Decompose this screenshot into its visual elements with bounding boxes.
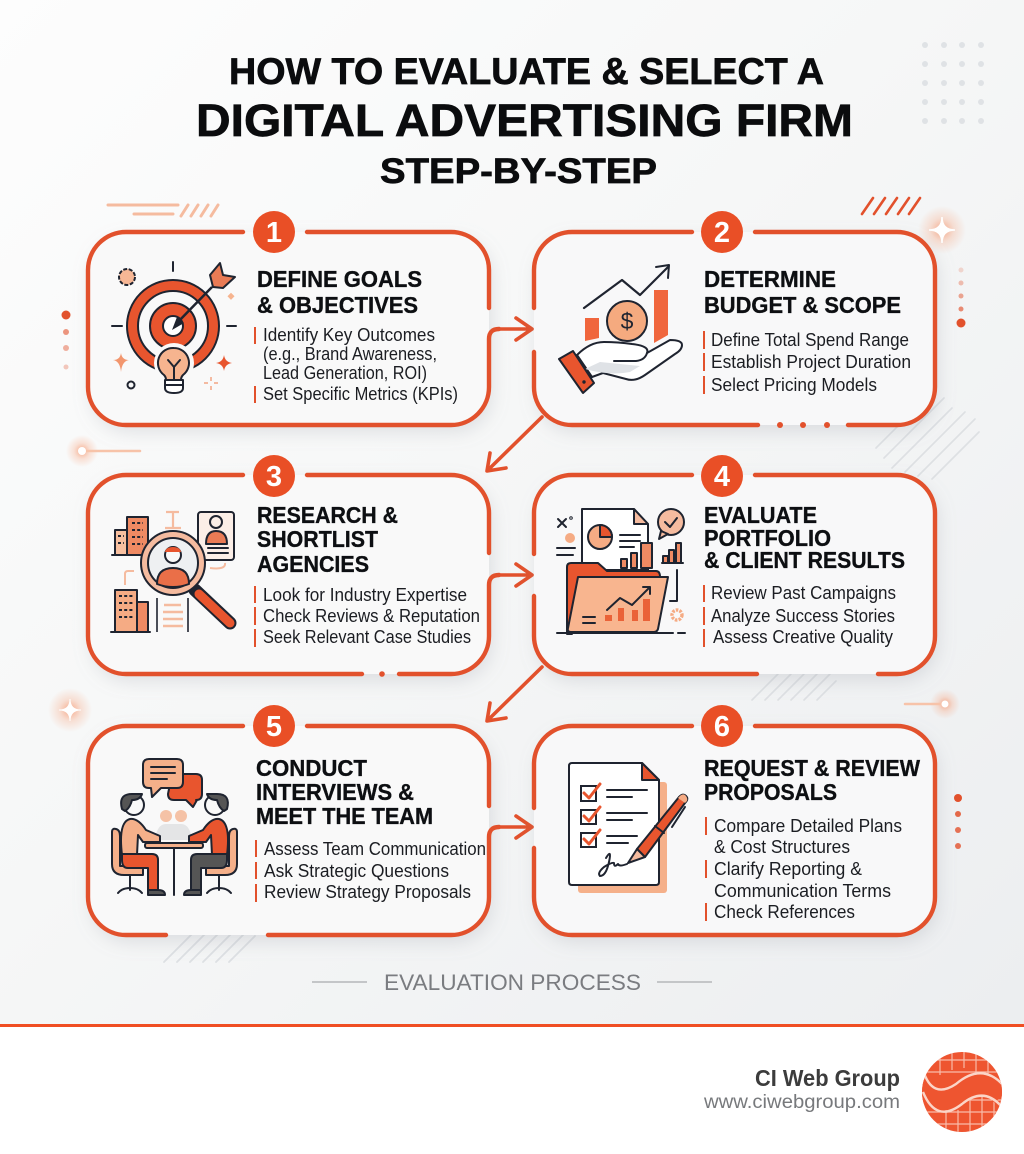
heading: DETERMINE xyxy=(704,266,836,292)
text block: Lead Generation, ROI) xyxy=(263,363,427,383)
text block: Define Total Spend Range xyxy=(711,330,909,350)
panel: step 4 evaluate portfolio: 4 xyxy=(714,461,730,493)
title: STEP-BY-STEP xyxy=(380,152,657,191)
title xyxy=(196,51,853,191)
panel: step 4 evaluate portfolio xyxy=(534,455,935,674)
heading: CONDUCT xyxy=(256,755,368,781)
text block: Clarify Reporting & xyxy=(714,859,862,879)
icon: CI Web Group logo xyxy=(920,1050,1004,1134)
text block: Ask Strategic Questions xyxy=(264,861,449,881)
figure: left person xyxy=(112,794,165,895)
title: DIGITAL ADVERTISING FIRM xyxy=(196,95,853,146)
heading xyxy=(257,502,398,577)
heading: & OBJECTIVES xyxy=(257,292,418,318)
text block: Assess Team Communication xyxy=(264,839,486,859)
text block: Set Specific Metrics (KPIs) xyxy=(263,384,458,404)
text block: (e.g., Brand Awareness, xyxy=(263,344,437,364)
heading: DEFINE GOALS xyxy=(257,266,422,292)
text block: Seek Relevant Case Studies xyxy=(263,627,471,647)
heading: PROPOSALS xyxy=(704,779,837,805)
text block: Establish Project Duration xyxy=(711,352,911,372)
text block: & Cost Structures xyxy=(714,837,850,857)
figure: right person xyxy=(184,794,237,895)
icon: checklist document with pen xyxy=(569,763,687,893)
brand text xyxy=(703,1065,900,1113)
panel: step 5 conduct interviews: 5 xyxy=(266,711,282,743)
panel: step 6 request proposals xyxy=(534,705,935,935)
icon: folder with reports and charts xyxy=(557,509,685,634)
caption: evaluation process: EVALUATION PROCESS xyxy=(384,970,641,995)
icon: hand with coin and growth chart: $ xyxy=(621,308,634,334)
panel: step 1 define goals xyxy=(88,211,499,425)
text block: Analyze Success Stories xyxy=(711,606,895,626)
panel: step 2 determine budget xyxy=(534,211,935,428)
heading xyxy=(704,266,901,318)
icon: hand with coin and growth chart xyxy=(559,265,682,393)
panel: step 3 research and shortlist: 3 xyxy=(266,461,282,493)
panel: step 2 determine budget: 2 xyxy=(714,217,730,249)
text block xyxy=(255,585,480,647)
text block: Check Reviews & Reputation xyxy=(263,606,480,626)
brand text: www.ciwebgroup.com xyxy=(703,1091,900,1113)
panel: step 1 define goals: 1 xyxy=(266,217,282,249)
text block: Compare Detailed Plans xyxy=(714,816,902,836)
text block xyxy=(256,839,486,902)
heading: REQUEST & REVIEW xyxy=(704,755,921,781)
heading: EVALUATE xyxy=(704,502,817,528)
icon: two people at a table talking xyxy=(112,759,237,895)
heading xyxy=(257,266,422,318)
heading: & CLIENT RESULTS xyxy=(704,547,905,573)
panel: step 5 conduct interviews xyxy=(88,705,499,935)
arrow: step 1 to step 2 xyxy=(499,318,532,340)
heading: MEET THE TEAM xyxy=(256,803,433,829)
text block: Review Strategy Proposals xyxy=(264,882,471,902)
text block: Assess Creative Quality xyxy=(713,627,893,647)
heading xyxy=(704,502,905,573)
heading: RESEARCH & xyxy=(257,502,398,528)
icon: magnifier with buildings and profile xyxy=(111,512,234,632)
heading xyxy=(704,755,921,805)
heading: SHORTLIST xyxy=(257,526,379,552)
heading: BUDGET & SCOPE xyxy=(704,292,901,318)
text block xyxy=(706,816,902,922)
text block: Look for Industry Expertise xyxy=(263,585,467,605)
text block: Identify Key Outcomes xyxy=(263,325,435,345)
brand text: CI Web Group xyxy=(755,1065,900,1091)
heading: AGENCIES xyxy=(257,551,369,577)
arrow: step 4 to step 5 xyxy=(487,667,542,721)
text block xyxy=(255,325,458,404)
panel: step 6 request proposals: 6 xyxy=(714,711,730,743)
heading xyxy=(256,755,433,829)
text block xyxy=(704,330,911,395)
heading: INTERVIEWS & xyxy=(256,779,414,805)
panel: step 3 research and shortlist xyxy=(88,455,499,677)
text block: Review Past Campaigns xyxy=(711,583,896,603)
text block xyxy=(704,583,896,647)
text block: Communication Terms xyxy=(714,881,891,901)
title: HOW TO EVALUATE & SELECT A xyxy=(229,51,824,92)
arrow: step 5 to step 6 xyxy=(499,816,532,838)
text block: Check References xyxy=(714,902,855,922)
footer xyxy=(0,1024,1024,1132)
arrow: step 3 to step 4 xyxy=(499,564,532,586)
heading: PORTFOLIO xyxy=(704,525,831,551)
text block: Select Pricing Models xyxy=(711,375,877,395)
arrow: step 2 to step 3 xyxy=(487,417,542,471)
icon: target with arrow and lightbulb xyxy=(112,262,236,393)
